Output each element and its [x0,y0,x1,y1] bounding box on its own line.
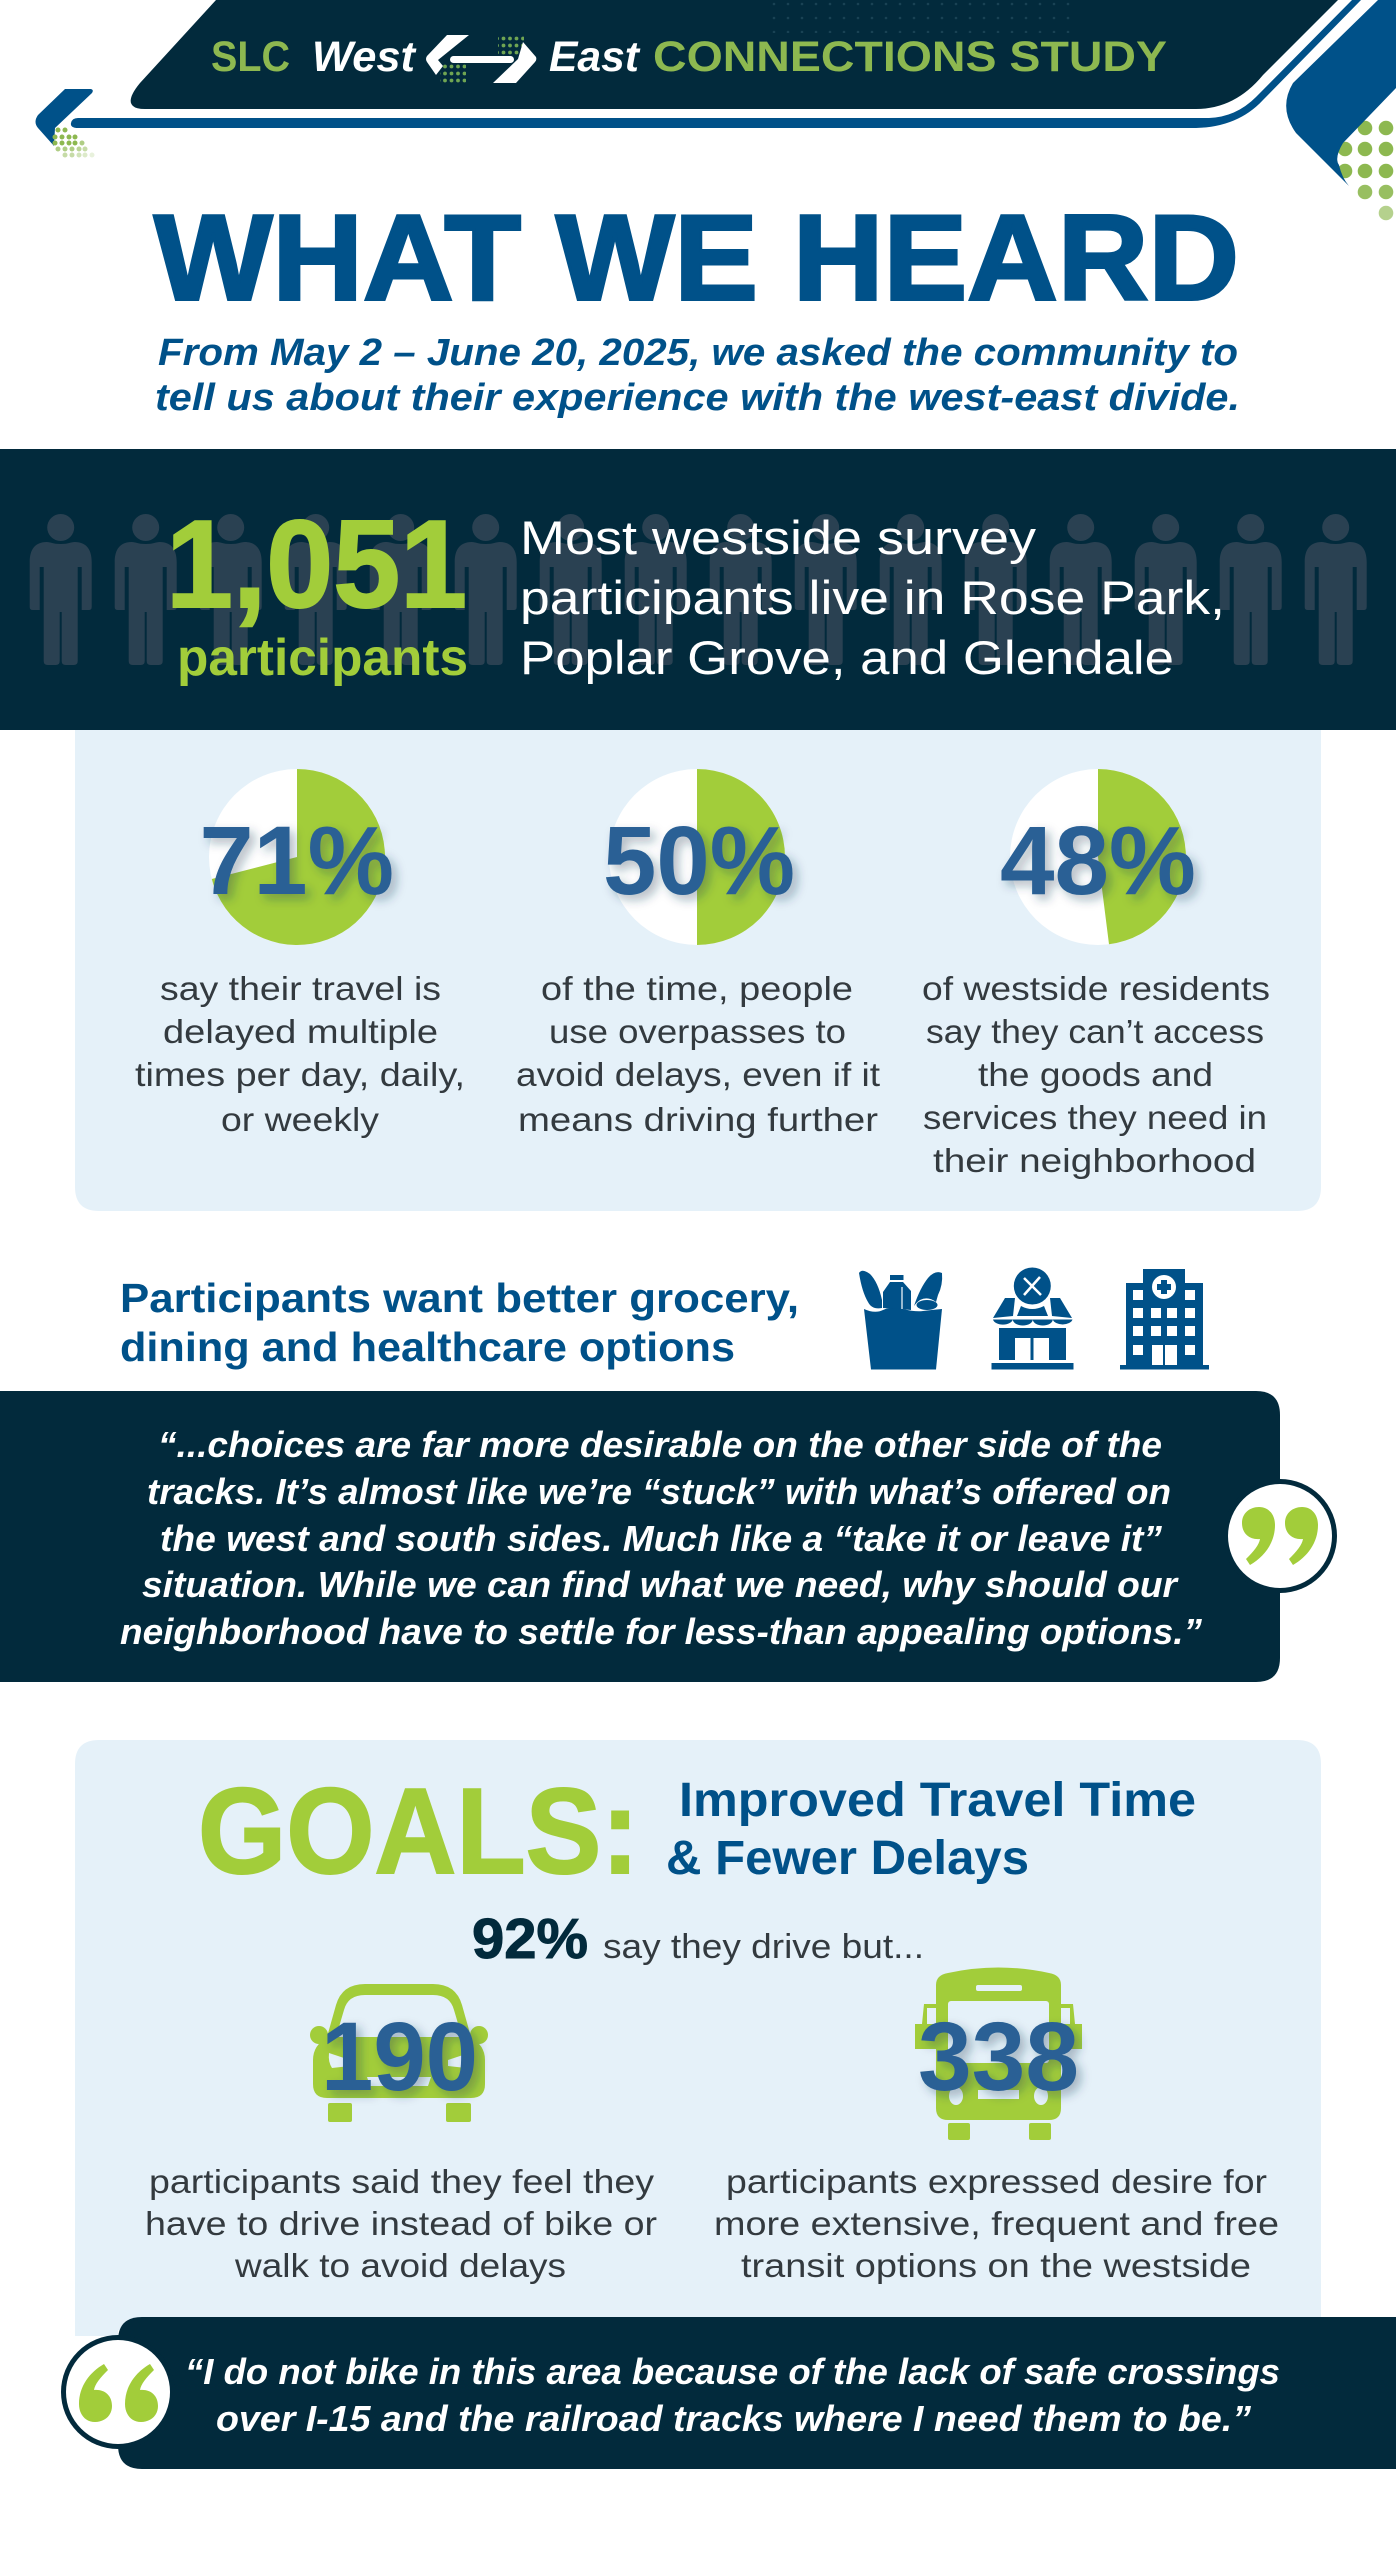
right green dots [1338,121,1393,220]
panel: goals [75,1740,1321,2336]
caption: transit options: participants expressed desire for [726,2163,1267,2200]
quote panel: choices [0,1391,1337,1682]
value 50%: 50% [603,806,795,915]
icon: car [310,1984,488,2122]
caption 71%: delayed multiple [163,1013,438,1050]
icon: bus [915,1968,1082,2140]
icon: hospital [1120,1269,1209,1370]
caption: transit options: transit options on the westside [741,2247,1251,2284]
icon: opening quote badge [61,2335,175,2449]
pie chart 71% [209,769,385,945]
caption 50%: means driving further [518,1101,878,1138]
participant count: 1,051 [166,496,467,634]
pie chart 50% [609,769,785,945]
band description: participants live in Rose Park, [520,571,1225,624]
goals subtitle: Improved Travel Time [679,1774,1196,1827]
caption 48%: the goods and [978,1056,1213,1093]
quote background [118,2317,1396,2469]
drive statistic [472,1907,924,1971]
caption 48%: of westside residents [922,970,1270,1007]
caption: drive instead [145,2163,657,2284]
quote text: tracks. It’s almost like we’re “stuck” with what’s offered on [147,1471,1171,1512]
quote background [0,1391,1280,1682]
icon: grocery bag [859,1271,942,1370]
subtitle [155,332,1240,419]
quote text: neighborhood have to settle for less-than appealing options.” [120,1611,1202,1652]
goals subtitle [666,1774,1196,1885]
heading: better options: Participants want better grocery, [120,1275,799,1321]
band description [520,511,1225,684]
banner dark shape [131,0,1338,109]
pie chart 48% [1010,769,1186,945]
caption: drive instead: walk to avoid delays [234,2247,566,2284]
drive statistic: say they drive but... [603,1928,924,1966]
caption 71% [135,970,465,1138]
caption 71%: say their travel is [160,970,441,1007]
drive statistic: 92% [472,1907,588,1971]
quote text [185,2351,1280,2439]
main title: WHAT WE HEARD [154,190,1239,326]
icon: restaurant storefront [992,1268,1074,1370]
goals background [75,1740,1321,2336]
quote text: situation. While we can find what we need, why should our [142,1564,1179,1605]
banner title text [211,33,1167,81]
icon: closing quote badge [1223,1479,1337,1593]
value 48%: 48% [1000,806,1196,915]
band description: Most westside survey [520,511,1037,564]
goals word: GOALS: [198,1763,639,1899]
quote text [120,1424,1202,1652]
left green dots [52,128,94,158]
caption 71%: or weekly [221,1101,380,1138]
caption: drive instead: have to drive instead of bike or [145,2205,657,2242]
panel: statistics [75,730,1321,1211]
subtitle: tell us about their experience with the west-east divide. [155,377,1240,419]
caption 71%: times per day, daily, [135,1056,465,1093]
caption 50%: use overpasses to [549,1013,846,1050]
quote panel: bike crossings [61,2317,1396,2469]
participants label: participants [177,629,468,687]
quote text: “I do not bike in this area because of the lack of safe crossings [185,2351,1280,2392]
band background [0,449,1396,730]
value 190: 190 [321,2002,478,2111]
caption: transit options [714,2163,1279,2284]
caption: drive instead: participants said they feel they [149,2163,655,2200]
caption: transit options: more extensive, frequent and free [714,2205,1279,2242]
caption 48%: services they need in [923,1099,1267,1136]
panel: participants band [0,449,1396,730]
two-way arrow icon [426,35,536,84]
subtitle: From May 2 – June 20, 2025, we asked the community to [158,332,1238,374]
caption 48%: say they can’t access [926,1013,1264,1050]
caption 48% [922,970,1270,1179]
blue road line [71,0,1361,128]
heading: better options: dining and healthcare options [120,1324,735,1370]
caption 48%: their neighborhood [933,1142,1256,1179]
banner title text: CONNECTIONS STUDY [653,33,1167,81]
caption 50%: avoid delays, even if it [516,1056,880,1093]
band description: Poplar Grove, and Glendale [520,631,1174,684]
goals subtitle: & Fewer Delays [666,1832,1029,1885]
banner title text: West [312,33,417,81]
stat: 50% [516,769,880,1138]
quote text: the west and south sides. Much like a “take it or leave it” [160,1518,1162,1559]
banner title text: East [549,33,641,81]
people silhouettes [30,514,1367,665]
banner faint dot texture [770,0,1070,33]
statistics background [75,730,1321,1211]
quote text: “...choices are far more desirable on the other side of the [158,1424,1162,1465]
caption 50%: of the time, people [541,970,853,1007]
heading: better options [120,1275,799,1370]
value 71%: 71% [200,806,394,915]
banner title text: SLC [211,33,290,81]
right blue chevron [1286,0,1396,186]
left blue chevron [36,89,93,146]
stat: 48% [922,769,1270,1179]
stat: 71% [135,769,465,1138]
quote text: over I-15 and the railroad tracks where I need them to be.” [216,2398,1251,2439]
header banner [36,0,1396,220]
caption 50% [516,970,880,1138]
value 338: 338 [918,2002,1079,2111]
